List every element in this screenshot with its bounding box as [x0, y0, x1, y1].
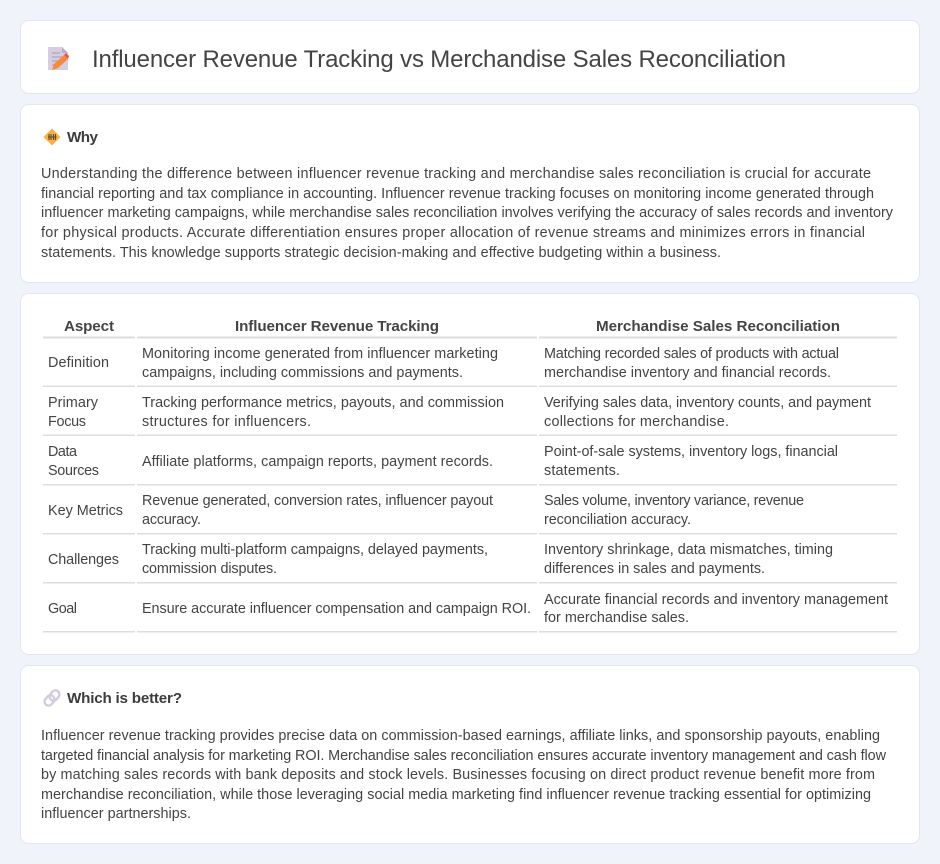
row: definition: [43, 346, 897, 387]
icon: link: [43, 689, 61, 707]
text block: why: influencer marketing campaigns, while merchandise sales reconciliation involves verifying the accuracy of sales records and inventory: [41, 205, 894, 221]
heading: why: Why: [67, 129, 99, 146]
row: goal: Accurate financial records and inventory management: [544, 592, 888, 608]
text block: why: financial reporting and tax compliance in accounting. Influencer revenue tracking focuses on monitoring income generated through: [41, 186, 874, 202]
row: challenges: Tracking multi-platform campaigns, delayed payments,: [142, 542, 488, 558]
row: data sources: Affiliate platforms, campaign reports, payment records.: [142, 454, 493, 470]
row: key metrics: Key Metrics: [48, 503, 123, 519]
text block: why: [41, 166, 894, 261]
row: key metrics: Sales volume, inventory variance, revenue: [544, 493, 804, 509]
table header: Aspect: [64, 318, 114, 335]
row: definition: Matching recorded sales of products with actual: [544, 346, 839, 362]
row: key metrics: reconciliation accuracy.: [544, 512, 691, 528]
panel: title: [20, 20, 920, 94]
text block: which is better: influencer partnerships.: [41, 806, 191, 822]
row: primary focus: Verifying sales data, inventory counts, and payment: [544, 395, 871, 411]
row: goal: Goal: [48, 601, 77, 617]
row: goal: Ensure accurate influencer compensation and campaign ROI.: [142, 601, 531, 617]
text block: why: for physical products. Accurate differentiation ensures proper allocation of revenue streams and minimizes errors in financial: [41, 225, 865, 241]
row: data sources: Data: [48, 444, 77, 460]
row: definition: campaigns, including commissions and payments.: [142, 365, 463, 381]
row: primary focus: Primary: [48, 395, 99, 411]
row: key metrics: accuracy.: [142, 512, 201, 528]
row: data sources: Sources: [48, 463, 99, 479]
row: key metrics: Revenue generated, conversion rates, influencer payout: [142, 493, 493, 509]
row: challenges: [43, 542, 897, 584]
row: challenges: commission disputes.: [142, 561, 277, 577]
panel: which is better: [20, 666, 920, 844]
row: definition: merchandise inventory and financial records.: [544, 365, 831, 381]
icon: document with pencil: [48, 47, 69, 70]
text block: which is better: targeted financial analysis for marketing ROI. Merchandise sales reconciliation ensures accurate inventory management and cash flow: [41, 748, 887, 764]
row: challenges: Inventory shrinkage, data mismatches, timing: [544, 542, 833, 558]
row: definition: Monitoring income generated from influencer marketing: [142, 346, 498, 362]
row: primary focus: Focus: [48, 414, 86, 430]
text block: which is better: merchandise reconciliation, while those leveraging social media marketing find influencer revenue tracking essential for optimizing: [41, 787, 871, 803]
text block: why: Understanding the difference between influencer revenue tracking and merchandise sales reconciliation is crucial for accurate: [41, 166, 871, 182]
row: goal: [43, 592, 897, 632]
table header: Merchandise Sales Reconciliation: [596, 318, 840, 335]
panel: comparison table: [20, 294, 920, 654]
row: primary focus: Tracking performance metrics, payouts, and commission: [142, 395, 504, 411]
heading: which is better: Which is better?: [67, 690, 182, 707]
row: data sources: [43, 444, 897, 486]
panel: why: [20, 104, 920, 282]
row: definition: Definition: [48, 355, 109, 371]
row: data sources: statements.: [544, 463, 620, 479]
table header: Influencer Revenue Tracking: [235, 318, 439, 335]
text block: why: statements. This knowledge supports strategic decision-making and effective budgeting within a business.: [41, 245, 721, 261]
text block: which is better: by matching sales records with bank deposits and stock levels. Businesses focusing on direct product revenue benefit more from: [41, 767, 875, 783]
row: challenges: differences in sales and payments.: [544, 561, 765, 577]
row: challenges: Challenges: [48, 552, 119, 568]
title text: Influencer Revenue Tracking vs Merchandise Sales Reconciliation: [92, 46, 786, 73]
row: goal: for merchandise sales.: [544, 610, 689, 626]
row: key metrics: [43, 493, 897, 534]
text block: which is better: Influencer revenue tracking provides precise data on commission-based earnings, affiliate links, and sponsorship payouts, enabling: [41, 728, 880, 744]
row: primary focus: collections for merchandise.: [544, 414, 729, 430]
row: primary focus: [43, 395, 897, 436]
row: primary focus: structures for influencers.: [142, 414, 311, 430]
icon: warning diamond: [44, 128, 60, 146]
row: data sources: Point-of-sale systems, inventory logs, financial: [544, 444, 838, 460]
text block: which is better: [41, 728, 887, 822]
table header: [43, 318, 897, 338]
